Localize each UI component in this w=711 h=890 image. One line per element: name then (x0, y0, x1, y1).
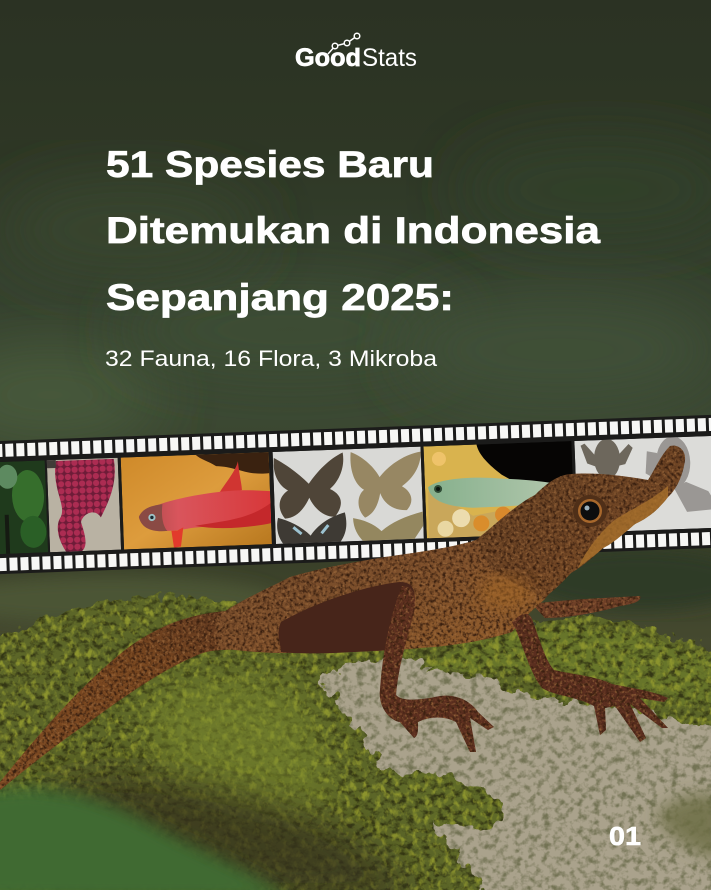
lizard (0, 446, 685, 790)
hind leg (380, 586, 494, 752)
moss mound (0, 596, 711, 890)
title (106, 144, 600, 318)
title: 51 Spesies Baru (106, 144, 434, 185)
blurred foreground leaf (0, 788, 290, 890)
lower moss tufts (385, 773, 503, 830)
title: Ditemukan di Indonesia (106, 210, 600, 251)
logo wordmark: Good (295, 44, 361, 72)
eye (573, 495, 607, 527)
mossy rock (0, 596, 711, 890)
frame: small fish on gravel (423, 441, 575, 538)
page number: 01 (609, 821, 641, 851)
orange snout (578, 486, 668, 568)
title: Sepanjang 2025: (106, 277, 454, 318)
bright moss patch (140, 677, 340, 806)
bottom sprocket holes (0, 532, 711, 571)
far legs (532, 596, 640, 618)
pale rock (322, 659, 711, 890)
logo: GoodStats (295, 33, 417, 72)
frame: forest (0, 460, 48, 555)
orange throat (479, 576, 531, 608)
frame: red fish (121, 452, 272, 550)
frog left (580, 440, 633, 476)
frame: red berries (47, 458, 121, 552)
top sprocket holes (0, 418, 711, 457)
front leg (512, 614, 668, 742)
tail (0, 610, 270, 790)
dark thigh (279, 582, 414, 653)
head and neck (476, 446, 685, 598)
film strip (0, 414, 711, 574)
frame: frogs (574, 434, 711, 533)
subtitle: 32 Fauna, 16 Flora, 3 Mikroba (105, 346, 438, 371)
logo chart mark (328, 36, 357, 54)
torso (215, 516, 560, 653)
frame: butterflies (273, 447, 424, 545)
dark shadow under moss (40, 775, 420, 890)
strip base (0, 414, 711, 574)
frog right (644, 435, 711, 513)
right moss (425, 628, 711, 712)
logo: GoodStats: Stats (362, 44, 417, 72)
